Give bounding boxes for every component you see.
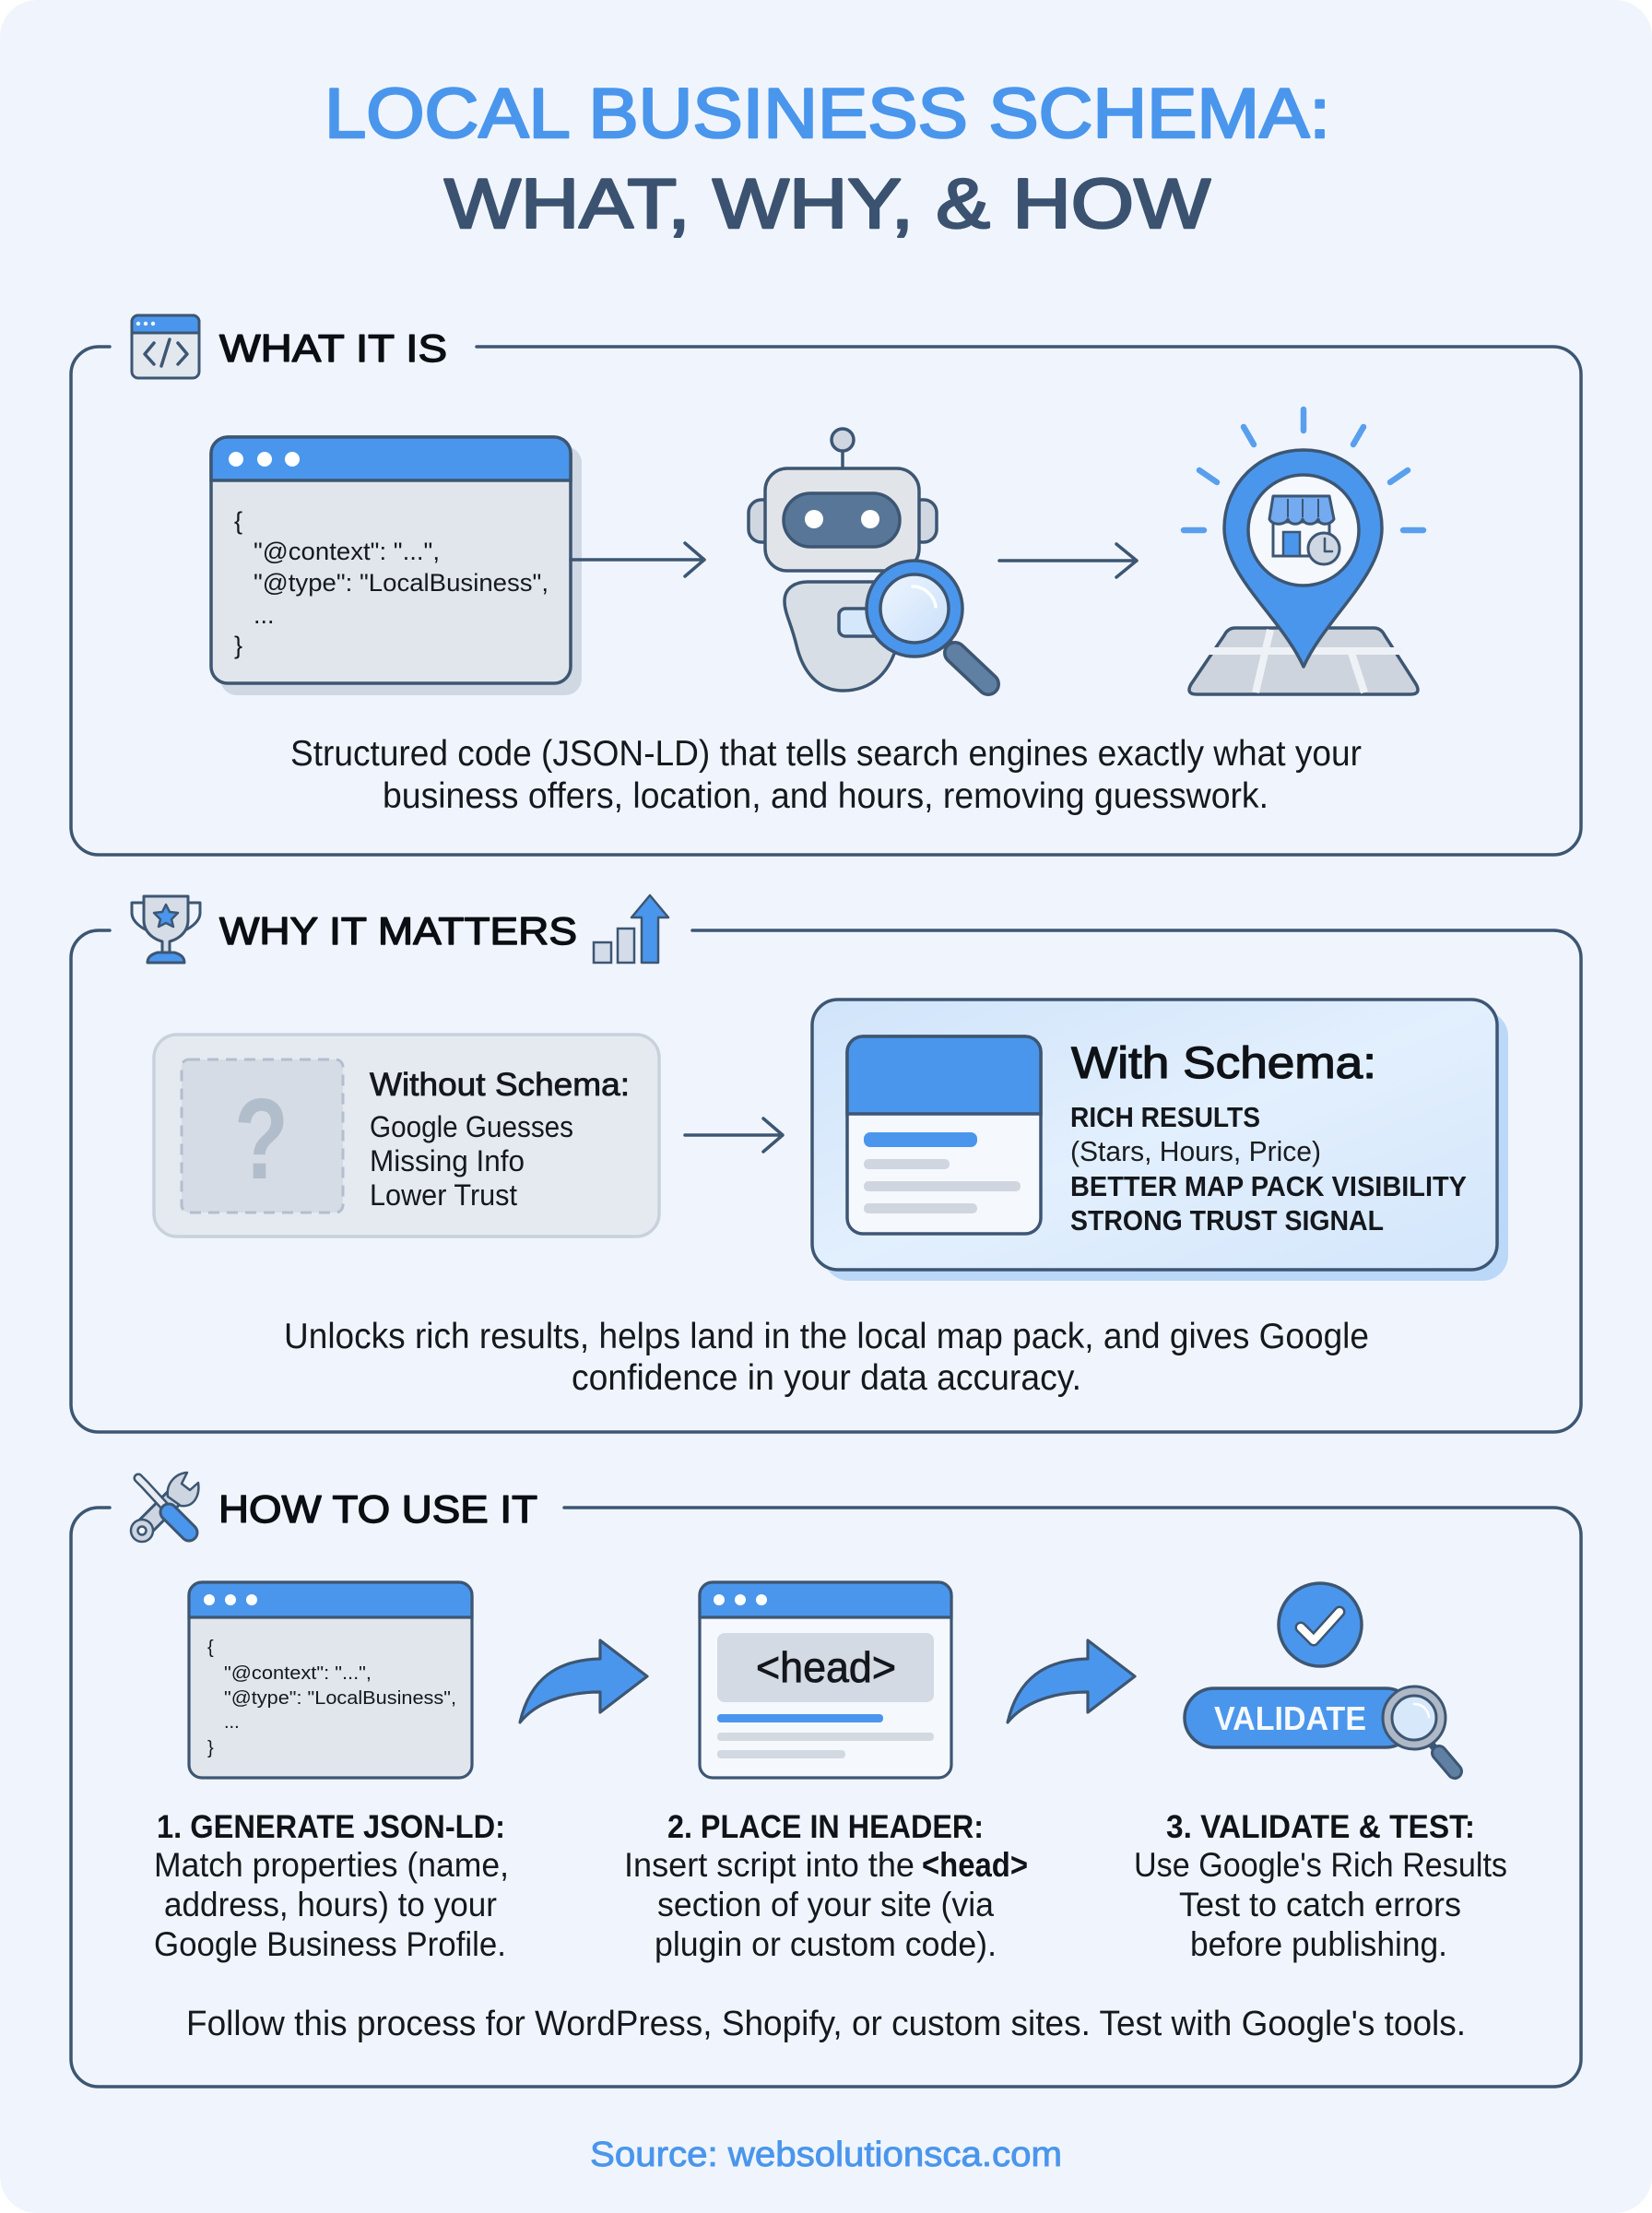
icon: robot with magnifier [749, 429, 988, 691]
step 2 text [624, 1809, 1028, 1963]
description: what it is: Structured code (JSON-LD) that tells search engines exactly what your [290, 734, 1362, 774]
arrow: step 2 to step 3 [1008, 1640, 1135, 1722]
search result illustration [847, 1036, 1041, 1234]
code window: ... [254, 601, 275, 629]
shop [1269, 496, 1339, 564]
step 3 text: 3. VALIDATE & TEST: [1166, 1809, 1475, 1845]
card: without schema: Missing Info [370, 1144, 525, 1178]
description: what it is [290, 734, 1362, 816]
card: with schema: (Stars, Hours, Price) [1070, 1135, 1321, 1167]
description: why it matters: confidence in your data accuracy. [572, 1358, 1081, 1398]
panel: why it matters [71, 895, 1581, 1432]
icon: map pin with shop [1184, 409, 1423, 694]
arrow: robot to pin [999, 544, 1137, 577]
step 1 code window: ... [224, 1712, 240, 1733]
code window [211, 437, 582, 695]
card: with schema: RICH RESULTS [1070, 1101, 1260, 1133]
code window: { [234, 507, 242, 535]
description: why it matters [284, 1317, 1369, 1398]
step 1 text [154, 1809, 509, 1963]
icon: validate check and button: VALIDATE [1214, 1699, 1366, 1737]
icon: code window [132, 315, 199, 378]
icon: validate check and button [1185, 1583, 1455, 1771]
heading: how to use it: HOW TO USE IT [218, 1487, 537, 1531]
step 1 code window: { [207, 1638, 214, 1658]
card: with schema: BETTER MAP PACK VISIBILITY [1070, 1170, 1467, 1202]
step 2 head window [700, 1582, 951, 1778]
title: LOCAL BUSINESS SCHEMA: [324, 75, 1330, 153]
arrow: without to with [685, 1118, 783, 1152]
heading: what it is: WHAT IT IS [219, 326, 447, 370]
icon: wrench and screwdriver [131, 1473, 198, 1542]
icon: trophy [132, 896, 200, 963]
step 2 text: section of your site (via [657, 1886, 994, 1923]
title [324, 75, 1330, 243]
code window: "@context": "...", [254, 538, 440, 565]
panel: what it is [71, 315, 1581, 855]
step 3 text: Use Google's Rich Results [1134, 1846, 1507, 1884]
card: without schema: Without Schema: [370, 1067, 630, 1103]
placeholder with question mark: ? [234, 1076, 289, 1203]
source line: Source: websolutionsca.com [590, 2136, 1062, 2174]
arrow: code to robot [571, 543, 704, 576]
code window: } [234, 632, 242, 659]
step 1 code window: "@type": "LocalBusiness", [224, 1688, 456, 1709]
card: without schema: Lower Trust [370, 1178, 517, 1212]
card: with schema [812, 1000, 1508, 1281]
description: how to use it: Follow this process for WordPress, Shopify, or custom sites. Test with Google's tools. [186, 2005, 1466, 2043]
step 2 text: Insert script into the [624, 1846, 914, 1884]
step 1 text: 1. GENERATE JSON-LD: [157, 1809, 505, 1845]
map [1189, 628, 1418, 694]
step 1 text: address, hours) to your [164, 1886, 497, 1923]
step 1 code window: "@context": "...", [224, 1663, 372, 1684]
step 2 text: 2. PLACE IN HEADER: [667, 1809, 984, 1845]
description: why it matters: Unlocks rich results, helps land in the local map pack, and gives Google [284, 1317, 1369, 1356]
heading: why it matters: WHY IT MATTERS [219, 909, 577, 953]
step 3 text [1134, 1809, 1507, 1963]
code window: "@type": "LocalBusiness", [254, 569, 549, 597]
step 2 text: plugin or custom code). [655, 1925, 997, 1963]
step 1 text: Match properties (name, [154, 1846, 509, 1884]
rays [1184, 409, 1423, 530]
step 2 text: <head> [922, 1846, 1028, 1884]
card: with schema: With Schema: [1071, 1039, 1376, 1088]
panel: how to use it [71, 1473, 1581, 2087]
title: WHAT, WHY, & HOW [444, 165, 1210, 243]
step 3 text: before publishing. [1190, 1925, 1447, 1963]
step 1 text: Google Business Profile. [154, 1925, 506, 1963]
card: without schema: Google Guesses [370, 1110, 573, 1143]
card: with schema: STRONG TRUST SIGNAL [1070, 1204, 1384, 1237]
placeholder with question mark [182, 1059, 343, 1213]
arrow: step 1 to step 2 [520, 1640, 647, 1722]
step 2 head window: <head> [756, 1643, 896, 1691]
step 1 code window: } [207, 1738, 214, 1758]
description: what it is: business offers, location, and hours, removing guesswork. [383, 776, 1268, 816]
step 1 code window [189, 1582, 472, 1778]
step 3 text: Test to catch errors [1179, 1886, 1461, 1923]
icon: bars with up arrow [594, 895, 668, 963]
card: without schema [154, 1035, 659, 1237]
